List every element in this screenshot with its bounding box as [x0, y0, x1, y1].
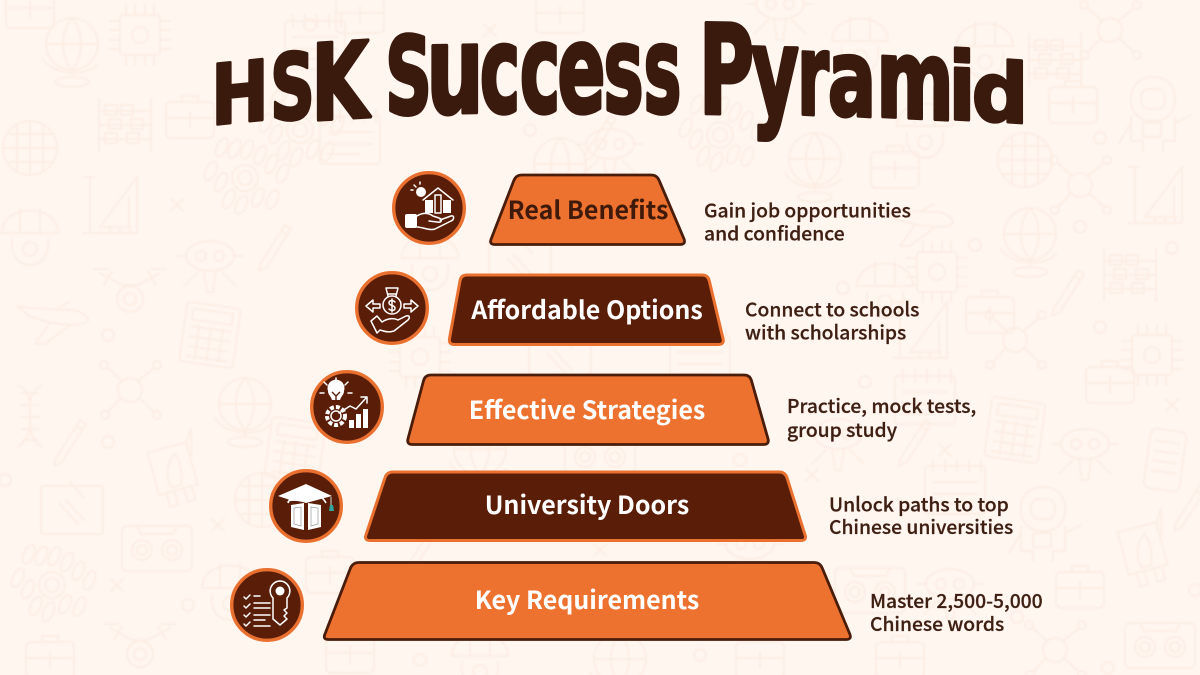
- title: r: [797, 9, 829, 142]
- title: y: [751, 1, 799, 144]
- tier description: Chinese universities: [829, 512, 1013, 540]
- tier description: and confidence: [704, 218, 845, 246]
- tier label: Effective Strategies: [469, 391, 705, 427]
- tier label: Affordable Options: [470, 291, 703, 327]
- tier description: Practice, mock tests,: [787, 391, 976, 419]
- tier description: group study: [787, 415, 898, 443]
- tier shape: [408, 375, 768, 444]
- tier shape: [449, 275, 723, 344]
- icon: hand holding growth bars: [394, 173, 464, 243]
- tier description: Unlock paths to top: [829, 490, 1009, 518]
- title: S: [385, 14, 432, 140]
- tier: Real Benefits: [394, 173, 911, 246]
- tier description: Connect to schools: [745, 294, 919, 322]
- tier label: University Doors: [485, 486, 689, 522]
- title: c: [480, 1, 520, 142]
- title: K: [311, 21, 372, 146]
- tier description: Master 2,500-5,000: [870, 586, 1043, 614]
- title: S: [270, 35, 315, 143]
- tier description: Gain job opportunities: [704, 196, 911, 224]
- tier description: Chinese words: [870, 609, 1004, 637]
- title: a: [828, 17, 876, 143]
- title: d: [972, 44, 1028, 144]
- title: H: [211, 43, 269, 146]
- icon: checklist and key: [232, 570, 302, 640]
- tier: University Doors: [271, 471, 1013, 541]
- title: s: [644, 1, 681, 141]
- title: [211, 0, 1028, 147]
- icon: graduation cap over doors: [271, 471, 341, 541]
- tier shape: [324, 562, 850, 640]
- tier label: Key Requirements: [475, 581, 699, 617]
- tier: Key Requirements: [232, 562, 1043, 640]
- title: u: [427, 0, 483, 143]
- title: i: [949, 33, 975, 143]
- icon: bulb, gear and chart: [312, 372, 382, 442]
- title: c: [520, 0, 560, 142]
- tier shape: [491, 175, 684, 244]
- tier: Affordable Options: [357, 273, 919, 346]
- tier shape: [366, 472, 806, 540]
- tier label: Real Benefits: [508, 191, 668, 227]
- title: s: [603, 1, 644, 140]
- tier: Effective Strategies: [312, 372, 976, 444]
- icon: money bag and hand: [357, 273, 427, 343]
- tier description: with scholarships: [745, 318, 906, 346]
- title: m: [876, 15, 954, 147]
- title: P: [699, 0, 754, 144]
- title: e: [558, 0, 605, 141]
